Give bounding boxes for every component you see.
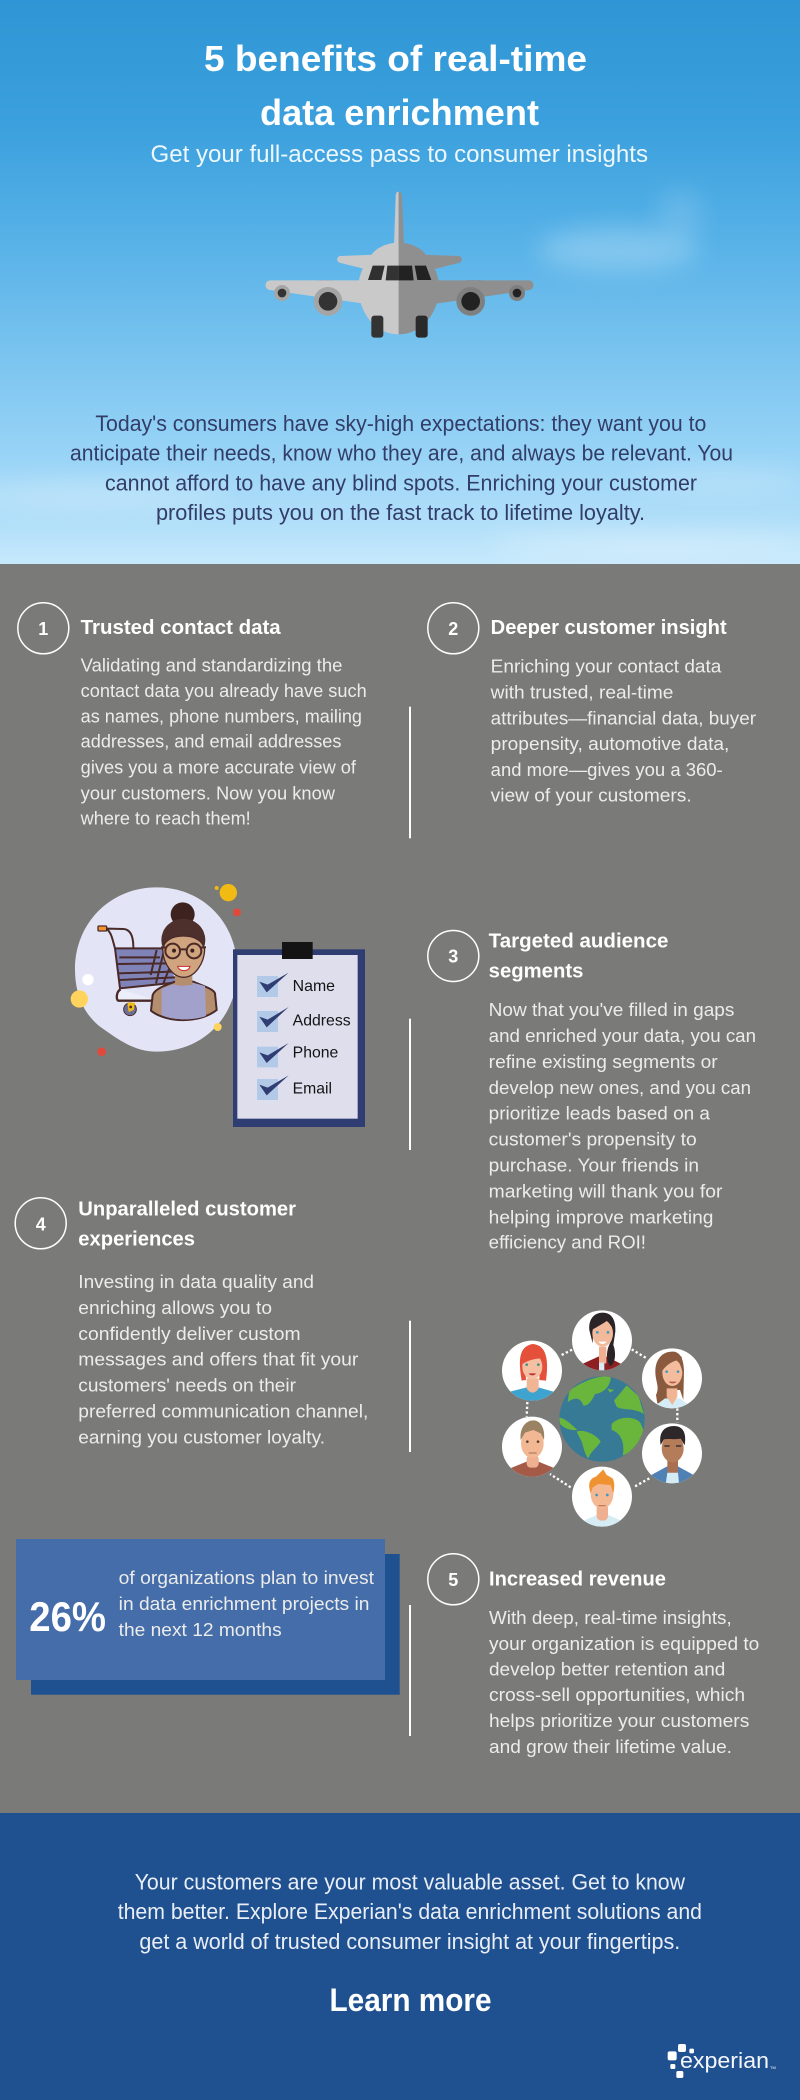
benefit 4: unparalleled customer experiences: enriching allows you to	[78, 1298, 272, 1318]
globe	[559, 1376, 645, 1462]
benefit 3: targeted audience segments: refine existing segments or	[489, 1052, 718, 1072]
footer text: get a world of trusted consumer insight at your fingertips.	[139, 1929, 680, 1954]
benefit 2: deeper customer insight: propensity, automotive data,	[491, 734, 729, 754]
benefit 1: trusted contact data: addresses, and email addresses	[81, 732, 341, 752]
benefit 5: increased revenue: 5	[448, 1570, 458, 1590]
title: data enrichment	[260, 92, 539, 133]
divider line: benefit 2	[409, 707, 411, 838]
benefit 4: unparalleled customer experiences: preferred communication channel,	[78, 1401, 368, 1421]
benefit 4: unparalleled customer experiences: customers' needs on their	[78, 1375, 296, 1395]
intro text: anticipate their needs, know who they are, and always be relevant. You	[70, 440, 733, 466]
divider line: benefit 4	[409, 1321, 411, 1452]
subtitle: Get your full-access pass to consumer insights	[150, 141, 648, 168]
benefit 2: deeper customer insight: 2	[448, 619, 458, 639]
check item: Phone: Phone	[293, 1044, 339, 1061]
benefit 3: targeted audience segments: customer's propensity to	[489, 1129, 697, 1149]
benefit 5: increased revenue: With deep, real-time insights,	[489, 1608, 732, 1628]
check item: Email: Email	[293, 1080, 332, 1097]
intro text: cannot afford to have any blind spots. Enriching your customer	[105, 470, 697, 496]
call to action: learn more: Learn more	[330, 1982, 492, 2018]
illustration: shopper with checklist	[71, 884, 365, 1127]
benefit 1: trusted contact data: gives you a more accurate view of	[81, 757, 357, 777]
benefit 3: targeted audience segments: purchase. Your friends in	[489, 1155, 699, 1175]
benefit 1: trusted contact data: where to reach them!	[80, 809, 251, 829]
benefit 3: targeted audience segments: helping improve marketing	[489, 1207, 713, 1227]
benefit 4: unparalleled customer experiences: Investing in data quality and	[78, 1272, 314, 1292]
footer text	[118, 1869, 702, 1954]
benefit 5: increased revenue: and grow their lifetime value.	[489, 1737, 732, 1757]
benefit 1: trusted contact data: 1	[38, 619, 48, 639]
callout: 26% statistic: of organizations plan to invest	[119, 1568, 374, 1588]
benefit 4: unparalleled customer experiences: 4	[36, 1215, 46, 1235]
logo: Experian: TM	[770, 2065, 776, 2070]
clipboard	[233, 942, 365, 1127]
benefit 3: targeted audience segments: prioritize leads based on a	[489, 1104, 711, 1124]
callout: 26% statistic	[16, 1539, 400, 1695]
benefit 3: targeted audience segments	[428, 930, 756, 1253]
benefit 2: deeper customer insight: attributes—financial data, buyer	[491, 708, 756, 728]
benefit 2: deeper customer insight: with trusted, real-time	[490, 682, 673, 702]
benefit 1: trusted contact data: as names, phone numbers, mailing	[81, 707, 362, 727]
check item: Email	[257, 1075, 332, 1100]
benefit 1: trusted contact data	[18, 603, 367, 829]
divider line: benefit 5	[409, 1605, 411, 1736]
decorative dots	[71, 884, 241, 1056]
benefit 3: targeted audience segments: 3	[448, 947, 458, 967]
person: bottom man	[572, 1467, 632, 1528]
benefit 5: increased revenue: Increased revenue	[489, 1568, 666, 1590]
benefit 5: increased revenue: cross-sell opportunities, which	[489, 1685, 745, 1705]
intro text: Today's consumers have sky-high expectations: they want you to	[95, 411, 706, 436]
benefit 3: targeted audience segments: Now that you've filled in gaps	[489, 1000, 734, 1020]
person: left man	[502, 1417, 562, 1478]
benefit 4: unparalleled customer experiences: earning you customer loyalty.	[78, 1427, 325, 1447]
divider line: benefit 3	[409, 1019, 411, 1150]
shopping cart	[98, 926, 176, 1016]
benefit 3: targeted audience segments: develop new ones, and you can	[489, 1078, 751, 1098]
benefit 2: deeper customer insight: Enriching your contact data	[491, 657, 722, 677]
logo: Experian: experian	[680, 2048, 769, 2073]
title	[204, 38, 587, 133]
benefit 4: unparalleled customer experiences: confidently deliver custom	[78, 1324, 301, 1344]
benefit 4: unparalleled customer experiences	[15, 1198, 368, 1447]
intro text: profiles puts you on the fast track to lifetime loyalty.	[156, 500, 645, 525]
logo: Experian	[668, 2044, 776, 2078]
panel: benefits background	[0, 564, 800, 1813]
callout: 26% statistic: in data enrichment projects in	[119, 1594, 369, 1614]
benefit 3: targeted audience segments: efficiency and ROI!	[489, 1233, 646, 1253]
check item: Name	[257, 973, 335, 997]
benefit 5: increased revenue: develop better retention and	[489, 1659, 725, 1679]
check item: Phone	[257, 1043, 339, 1067]
benefit 3: targeted audience segments: segments	[489, 960, 583, 982]
benefit 4: unparalleled customer experiences: Unparalleled customer	[78, 1199, 296, 1221]
person: right man	[642, 1423, 702, 1487]
footer text: them better. Explore Experian's data enrichment solutions and	[118, 1899, 702, 1924]
benefit 3: targeted audience segments: and enriched your data, you can	[489, 1026, 756, 1046]
footer text: Your customers are your most valuable asset. Get to know	[135, 1869, 685, 1894]
benefit 4: unparalleled customer experiences: messages and offers that fit your	[78, 1350, 358, 1370]
benefit 2: deeper customer insight: view of your customers.	[491, 786, 692, 806]
benefit 5: increased revenue: helps prioritize your customers	[489, 1711, 749, 1731]
benefit 5: increased revenue: your organization is equipped to	[489, 1634, 759, 1654]
benefit 2: deeper customer insight	[428, 603, 756, 806]
illustration: global customers around a globe	[502, 1310, 702, 1528]
benefit 1: trusted contact data: your customers. Now you know	[81, 783, 336, 803]
panel: footer	[0, 1813, 800, 2100]
icon: airplane	[266, 192, 534, 338]
blob background	[75, 887, 237, 1052]
callout: 26% statistic: 26%	[29, 1593, 106, 1640]
check item: Address: Address	[293, 1012, 351, 1029]
panel: sky hero background	[0, 0, 800, 564]
person: right woman	[642, 1348, 702, 1412]
benefit 5: increased revenue	[428, 1554, 759, 1757]
benefit 3: targeted audience segments: marketing will thank you for	[489, 1181, 722, 1201]
benefit 2: deeper customer insight: Deeper customer insight	[491, 617, 727, 639]
check item: Address	[257, 1007, 351, 1032]
connecting dotted lines	[527, 1349, 677, 1487]
benefit 3: targeted audience segments: Targeted audience	[489, 930, 668, 952]
benefit 1: trusted contact data: Trusted contact data	[81, 617, 282, 639]
title: 5 benefits of real-time	[204, 38, 587, 79]
benefit 2: deeper customer insight: and more—gives you a 360-	[491, 760, 723, 780]
callout: 26% statistic: the next 12 months	[119, 1620, 282, 1640]
woman	[151, 902, 217, 1020]
person: top woman	[572, 1310, 632, 1373]
person: left woman	[502, 1341, 562, 1403]
check item: Name: Name	[293, 978, 335, 995]
intro text	[70, 411, 733, 525]
benefit 1: trusted contact data: contact data you already have such	[81, 681, 367, 701]
benefit 4: unparalleled customer experiences: experiences	[78, 1229, 195, 1251]
benefit 1: trusted contact data: Validating and standardizing the	[81, 656, 342, 676]
